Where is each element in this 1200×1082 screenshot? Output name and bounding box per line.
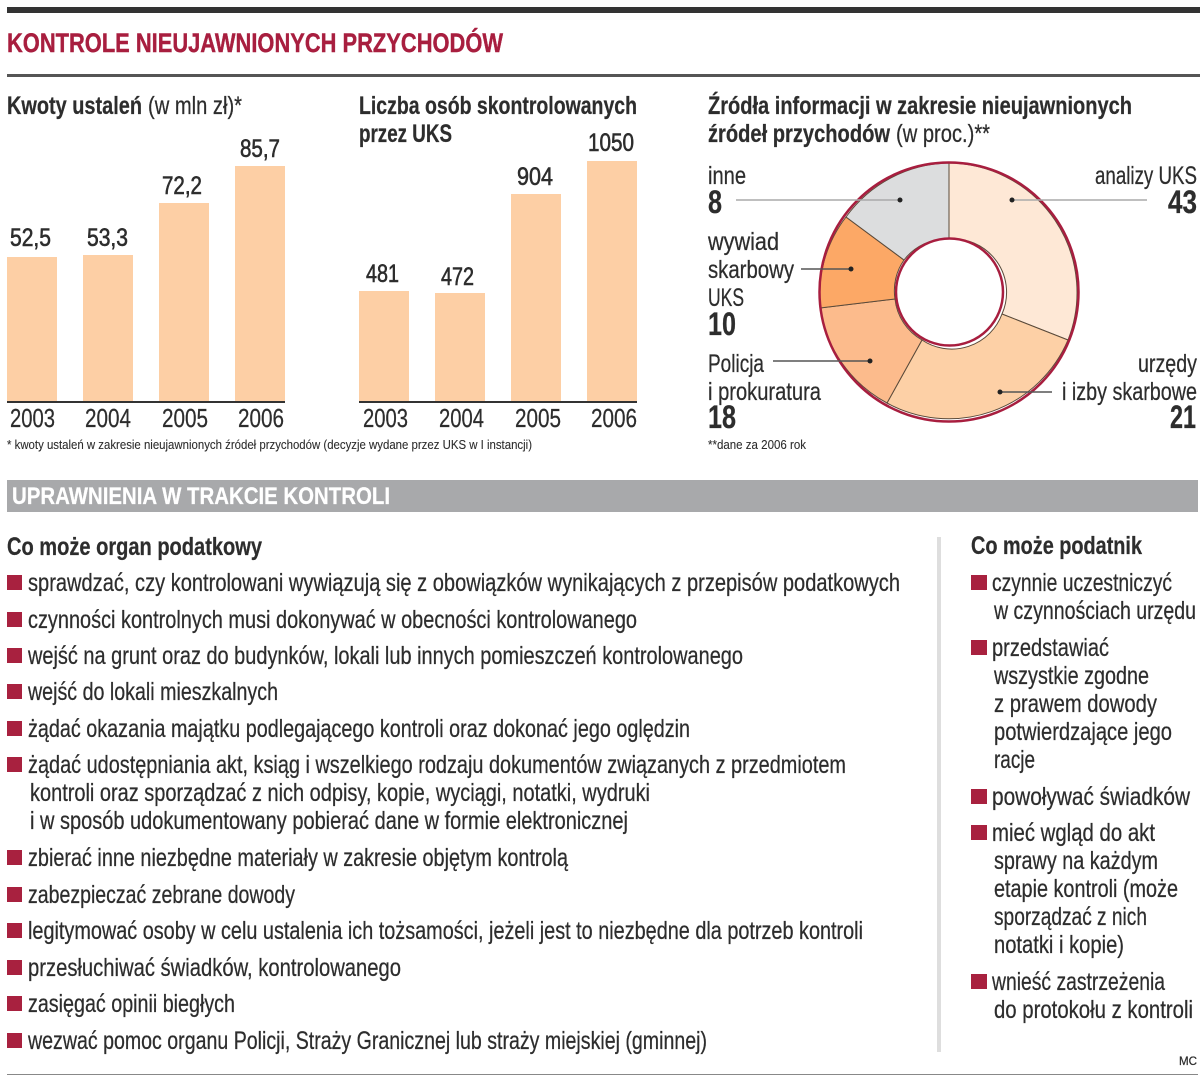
donut chart bbox=[819, 162, 1078, 422]
heading: liczba osób: przez UKS bbox=[359, 120, 452, 148]
label: wywiad skarbowy UKS: skarbowy bbox=[708, 256, 794, 284]
list text: notatki i kopie) bbox=[994, 931, 1124, 959]
list text: sprawy na każdym bbox=[994, 847, 1158, 875]
bars bbox=[359, 161, 637, 401]
list text bbox=[27, 569, 900, 1055]
year labels: 2006 bbox=[238, 403, 284, 433]
bar values: 53,3 bbox=[87, 224, 128, 252]
year labels bbox=[363, 403, 637, 433]
label: wywiad skarbowy UKS: 10 bbox=[708, 306, 736, 342]
label: inne: inne bbox=[708, 162, 746, 190]
bar values: 904 bbox=[517, 163, 553, 191]
list text: przesłuchiwać świadków, kontrolowanego bbox=[28, 954, 401, 982]
list text: sporządzać z nich bbox=[994, 903, 1147, 931]
list text: wejść na grunt oraz do budynków, lokali lub innych pomieszczeń kontrolowanego bbox=[27, 642, 743, 670]
year labels bbox=[10, 403, 284, 433]
label: urzędy i izby skarbowe bbox=[1062, 350, 1197, 435]
panel: co może podatnik bbox=[971, 532, 1196, 1024]
list text: zabezpieczać zebrane dowody bbox=[28, 881, 295, 909]
heading: liczba osób: Liczba osób skontrolowanych bbox=[359, 92, 637, 120]
list text: kontroli oraz sporządzać z nich odpisy, kopie, wyciągi, notatki, wydruki bbox=[30, 779, 650, 807]
heading: kwoty ustaleń: Kwoty ustaleń bbox=[7, 92, 142, 120]
year labels: 2005 bbox=[162, 403, 208, 433]
section heading: uprawnienia w trakcie kontroli bbox=[7, 480, 1198, 512]
label: analizy UKS bbox=[1095, 162, 1197, 220]
footnote: kwoty ustaleń: * kwoty ustaleń w zakresie nieujawnionych źródeł przychodów (decyzje wydane przez UKS w I instancji) bbox=[7, 437, 532, 452]
label: inne: 8 bbox=[708, 184, 722, 220]
bar values: 1050 bbox=[588, 129, 634, 157]
panel: liczba osób bar chart bbox=[359, 92, 637, 433]
heading: źródła informacji: (w proc.)** bbox=[896, 120, 990, 148]
list text bbox=[991, 569, 1196, 1024]
list text: wejść do lokali mieszkalnych bbox=[27, 678, 278, 706]
label: policja i prokuratura: 18 bbox=[708, 399, 736, 435]
label: policja i prokuratura bbox=[708, 350, 821, 435]
list bullets bbox=[7, 575, 22, 1048]
year labels: 2004 bbox=[85, 403, 131, 433]
list text: i w sposób udokumentowany pobierać dane w formie elektronicznej bbox=[30, 807, 628, 835]
title: KONTROLE NIEUJAWNIONYCH PRZYCHODÓW bbox=[7, 27, 503, 58]
bar values bbox=[366, 129, 634, 291]
year labels: 2006 bbox=[591, 403, 637, 433]
list text: żądać udostępniania akt, ksiąg i wszelkiego rodzaju dokumentów związanych z przedmiotem bbox=[28, 751, 846, 779]
panel: źródła informacji donut chart bbox=[707, 91, 1197, 452]
heading: źródła informacji bbox=[708, 91, 1132, 148]
list text: wezwać pomoc organu Policji, Straży Granicznej lub straży miejskiej (gminnej) bbox=[27, 1027, 707, 1055]
list text: zasięgać opinii biegłych bbox=[28, 990, 235, 1018]
list text: z prawem dowody bbox=[994, 690, 1157, 718]
label: wywiad skarbowy UKS: wywiad bbox=[707, 228, 779, 256]
label: wywiad skarbowy UKS bbox=[707, 228, 794, 342]
list text: legitymować osoby w celu ustalenia ich tożsamości, jeżeli jest to niezbędne dla potrzeb kontroli bbox=[28, 917, 863, 945]
list text: zbierać inne niezbędne materiały w zakresie objętym kontrolą bbox=[28, 844, 568, 872]
year labels: 2003 bbox=[10, 403, 55, 433]
list text: mieć wgląd do akt bbox=[992, 819, 1155, 847]
list text: sprawdzać, czy kontrolowani wywiązują się z obowiązków wynikających z przepisów podatkowych bbox=[28, 569, 900, 597]
bar values: 472 bbox=[441, 263, 474, 291]
panel: kwoty ustaleń bar chart bbox=[7, 92, 285, 433]
list text: racje bbox=[994, 746, 1035, 774]
bar values: 52,5 bbox=[10, 224, 51, 252]
bar values: 85,7 bbox=[240, 135, 280, 163]
label: policja i prokuratura: i prokuratura bbox=[708, 378, 821, 406]
heading: kwoty ustaleń: (w mln zł)* bbox=[148, 92, 242, 120]
heading: liczba osób bbox=[359, 92, 637, 148]
list text: przedstawiać bbox=[992, 634, 1109, 662]
label: wywiad skarbowy UKS: UKS bbox=[708, 284, 744, 312]
heading: źródła informacji: źródeł przychodów bbox=[708, 120, 890, 148]
panel: co może organ podatkowy bbox=[7, 533, 900, 1055]
year labels: 2005 bbox=[515, 403, 561, 433]
bar values bbox=[10, 135, 280, 252]
year labels: 2004 bbox=[439, 403, 484, 433]
label: inne bbox=[708, 162, 746, 220]
year labels: 2003 bbox=[363, 403, 408, 433]
bars bbox=[7, 166, 285, 401]
footnote: dane za 2006: **dane za 2006 rok bbox=[708, 437, 806, 452]
bar values: 481 bbox=[366, 260, 399, 288]
list bullets bbox=[971, 575, 987, 989]
section heading: uprawnienia w trakcie kontroli: UPRAWNIENIA W TRAKCIE KONTROLI bbox=[12, 483, 390, 510]
credit: MC: MC bbox=[1179, 1054, 1197, 1068]
heading: co może organ: Co może organ podatkowy bbox=[7, 533, 262, 561]
list text: wszystkie zgodne bbox=[993, 662, 1149, 690]
list text: żądać okazania majątku podlegającego kontroli oraz dokonać jego oględzin bbox=[28, 715, 690, 743]
bar values: 72,2 bbox=[162, 172, 202, 200]
list text: czynności kontrolnych musi dokonywać w obecności kontrolowanego bbox=[28, 606, 637, 634]
label: policja i prokuratura: Policja bbox=[708, 350, 764, 378]
leader lines bbox=[736, 198, 1147, 394]
heading: co może podatnik: Co może podatnik bbox=[971, 532, 1142, 560]
